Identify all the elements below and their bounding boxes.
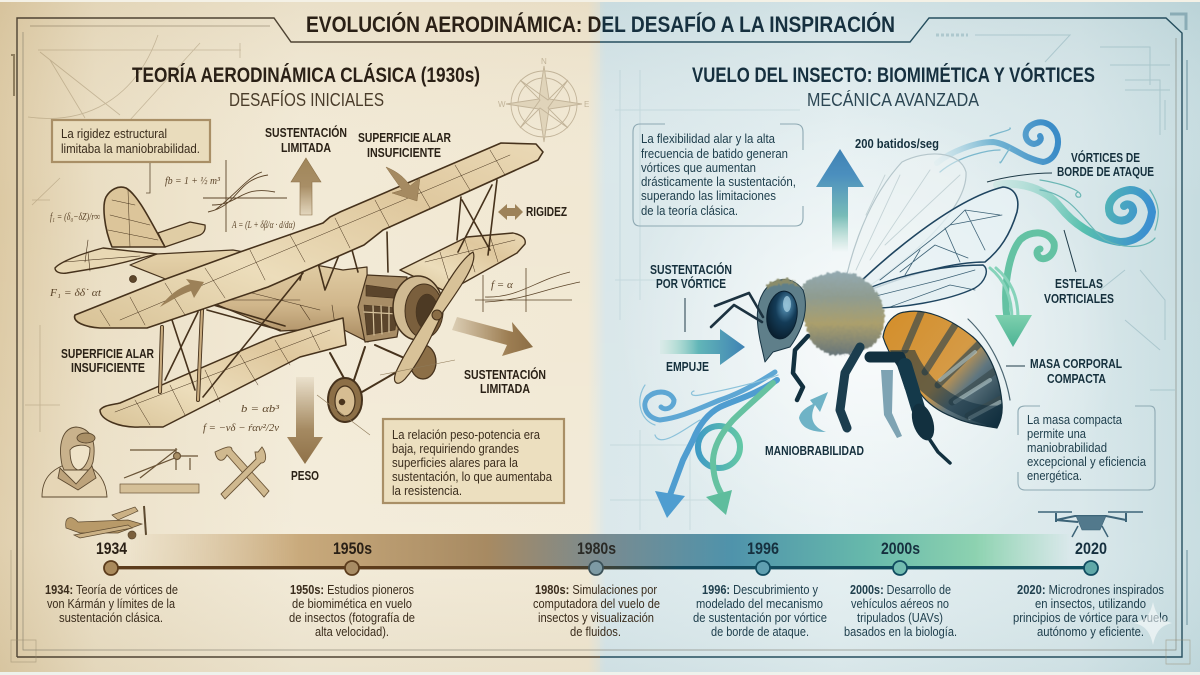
illustration: biplane [55,143,543,427]
arrow: blue down [655,491,685,518]
middle leg [840,347,860,428]
hind leg [870,357,910,387]
compound eye [764,289,800,341]
milestone: 2020 [1013,539,1168,639]
callout: wing flexibility: frecuencia de batido generan [641,146,788,161]
milestone: 2000s: 2000s [881,539,920,558]
back wing faint [842,154,966,302]
tail fin [104,187,165,247]
tail stabilizer [55,248,157,273]
callout: compact mass: energética. [1027,468,1082,483]
milestone: 2020: autónomo y eficiente. [1037,624,1144,639]
cockpit ring [268,256,290,276]
label: insufficient wing surface bottom: SUPERFICIE ALAR [61,346,154,361]
illustration: bee [711,154,1018,463]
milestone: 1996: modelado del mecanismo [696,596,823,611]
milestone: 1934: 1934: Teoría de vórtices de [45,582,178,597]
engine cowling [393,276,443,340]
label: limited lift top: SUSTENTACIÓN [265,125,347,140]
label: limited lift bottom [464,367,546,396]
arrow: thrust [660,329,745,365]
icon: crossed wrenches [215,447,269,499]
front leg [793,336,808,400]
label: limited lift top [265,125,347,155]
milestone: 1996 [693,539,827,639]
green stream [713,383,773,495]
wing struts [160,310,202,400]
milestone: 1950s: de biomimética en vuelo [292,596,412,611]
icon: compass rose: E [584,100,589,109]
rear stabilizer [158,222,205,247]
milestone: 2000s: vehículos aéreos no [851,596,949,611]
milestone: 1950s: de insectos (fotografía de [289,610,415,625]
label: vortex lift: POR VÓRTICE [656,276,726,291]
milestone: 1950s [289,539,415,639]
panel: insect flight [633,63,1158,537]
callout: structural rigidity [52,120,210,193]
upper wing [75,143,543,328]
callout: compact mass [1018,406,1155,490]
lower left wing [100,318,346,427]
label: compact body mass: COMPACTA [1047,371,1106,386]
abdomen [884,312,1002,428]
math sketch: lift formula and graph: A = (L + δβ/α · d/dα) [231,219,295,231]
arrow: beat frequency up [816,149,864,252]
math sketch: left formulas: F₁ = δδ˙ αt [49,287,102,299]
callout: weight to power ratio: La relación peso-potencia era [392,427,541,442]
callout: weight to power ratio: superficies alares para la [392,455,519,470]
math sketch: lower formula: b = αb³ [241,403,280,415]
label: insufficient wing surface bottom: INSUFICIENTE [71,360,145,375]
milestone: 2000s [844,539,957,639]
math sketch: lift formula and graph: fb = 1 + ½ m³ [165,175,221,187]
subheading: initial challenges: DESAFÍOS INICIALES [229,90,384,110]
label: rigidity with arrow: RIGIDEZ [526,204,567,219]
label: leading edge vortices: VÓRTICES DE [1071,150,1140,165]
label: insufficient wing surface bottom [61,346,154,375]
callout: wing flexibility: La flexibilidad alar y la alta [641,131,776,146]
label: vortex wakes: ESTELAS [1055,276,1103,291]
milestone: 2000s: basados en la biología. [844,624,957,639]
arrow: curved on wing [160,279,204,307]
milestone: 1980s: 1980s [577,539,616,558]
label: vortex wakes [1044,230,1114,306]
fore wing [840,187,1018,302]
milestone: 1934: von Kármán y límites de la [47,596,176,611]
abdomen outline [883,311,1002,428]
fuselage [130,250,368,342]
timeline colour band [130,534,1070,568]
background: circuit traces, right [610,35,1175,530]
milestone: 1980s [533,539,660,639]
math sketch: right graph [475,268,580,312]
arrow: green wake down [995,315,1032,347]
label: leading edge vortices [987,150,1154,182]
label: wing beats: 200 batidos/seg [855,136,939,151]
blue stream [670,380,777,495]
head [757,280,805,362]
math sketch: left formulas [49,211,102,299]
label: limited lift bottom: LIMITADA [480,381,530,396]
illustration: vortex swirls lower left [640,372,778,495]
callout: weight to power ratio: la resistencia. [392,483,462,498]
main wheel [328,378,362,422]
icon: compass rose: N [541,57,547,66]
label: limited lift top: LIMITADA [281,140,331,155]
callout: wing flexibility: superando las limitaciones [641,188,776,203]
milestone: 2020: en insectos, utilizando [1035,596,1146,611]
tail wheel [130,276,136,282]
antennae [711,293,763,327]
label: compact body mass: MASA CORPORAL [1030,356,1122,371]
callout: weight to power ratio: sustentación, lo que aumentaba [392,469,553,484]
label: insufficient wing surface top: INSUFICIENTE [367,145,441,160]
icon: compass rose: W [498,100,506,109]
callout: wing flexibility [633,124,803,226]
milestone: 1980s: 1980s: Simulaciones por [535,582,658,597]
icon: compass rose [498,57,589,142]
label: maneuverability: MANIOBRABILIDAD [765,443,864,458]
main title: EVOLUCIÓN AERODINÁMICA: DEL DESAFÍO A LA INSPIRACIÓN [306,12,895,37]
label: vortex lift [650,262,732,332]
callout: compact mass: permite una [1027,426,1087,441]
hind wing [840,265,986,308]
milestone: 1950s: 1950s: Estudios pioneros [290,582,414,597]
label: vortex wakes: VORTICIALES [1044,291,1114,306]
milestone: 1996: 1996: Descubrimiento y [702,582,818,597]
icon: drafting tool and ruler [120,448,199,493]
swirl: green ring [698,426,740,468]
milestone: 1980s: computadora del vuelo de [533,596,660,611]
milestone: 1980s: de fluidos. [570,624,621,639]
label: insufficient wing surface top: SUPERFICIE ALAR [358,130,451,145]
math sketch: left formulas: f₁ = (δ₀−δZ)/r∞ [50,211,100,223]
background: drafting sketch lines, left [25,35,241,432]
math sketch: lower formula [203,360,455,435]
callout: compact mass: maniobrabilidad [1027,440,1107,455]
icon: pilot portrait [42,427,107,497]
arrow: maneuverability [799,392,828,432]
milestone: 1996: de borde de ataque. [711,624,809,639]
callout: compact mass: excepcional y eficiencia [1027,454,1147,469]
math sketch: right graph: f = α [491,279,513,291]
callout: weight to power ratio: baja, requiriendo grandes [392,441,519,456]
label: limited lift bottom: SUSTENTACIÓN [464,367,546,382]
milestone: 2020: principios de vórtice para vuelo [1013,610,1168,625]
label: vortex lift: SUSTENTACIÓN [650,262,732,277]
callout: structural rigidity: limitaba la maniobrabilidad. [61,141,200,156]
abdomen arc [968,319,1010,400]
milestone: 2020: 2020: Microdrones inspirados [1017,582,1164,597]
propeller [395,252,474,383]
swirl: green down [1006,233,1054,318]
panel: classical aerodynamic theory [42,57,589,539]
milestone: 1934: 1934 [96,539,127,558]
faint rear leg [881,370,902,438]
heading: insect flight: VUELO DEL INSECTO: BIOMIMÉTICA Y VÓRTICES [692,63,1095,87]
milestone: 2000s: 2000s: Desarrollo de [850,582,951,597]
label: insufficient wing surface top [358,130,451,160]
timeline axis [111,566,1091,569]
icon: drone [1038,512,1143,537]
landing gear [330,345,420,392]
callout: wing flexibility: vórtices que aumentan [641,160,756,175]
thorax [802,272,884,355]
engine cylinders [358,275,407,342]
milestone: 1934: sustentación clásica. [59,610,163,625]
milestone: 1934 [45,539,178,625]
illustration: vortex swirls upper right [937,122,1158,320]
subheading: advanced mechanics: MECÁNICA AVANZADA [807,90,979,110]
milestone: 1980s: insectos y visualización [538,610,654,625]
icon: small biplane [66,506,146,539]
label: rigidity with arrow [498,204,567,220]
math sketch: lift formula and graph [165,160,295,232]
arrow: weight down [287,377,323,464]
arrow: lift up [291,158,321,215]
milestone: 1996: de sustentación por vórtice [693,610,827,625]
swirl: teal trailing [997,184,1152,242]
label: compact body mass [1006,356,1122,386]
callout: weight to power ratio [383,419,564,503]
callout: structural rigidity: La rigidez estructural [61,126,167,141]
milestone: 2000s: tripulados (UAVs) [857,610,943,625]
icon: sparkle watermark [1134,602,1172,645]
math sketch: lower formula: f = −νδ − ŕαν²/2ν [203,422,279,434]
callout: wing flexibility: drásticamente la sustentación, [641,174,796,189]
callout: compact mass: La masa compacta [1027,412,1123,427]
callout: wing flexibility: de la teoría clásica. [641,203,738,218]
rear wheel [410,345,436,379]
swirl: leading edge blue [937,122,1058,163]
arrow: green down [706,490,732,515]
milestone: 1950s: 1950s [333,539,372,558]
label: weight: PESO [291,468,319,483]
label: thrust: EMPUJE [666,359,709,374]
milestone: 2020: 2020 [1075,539,1107,558]
arrow: limited lift right [452,317,533,356]
milestone: 1950s: alta velocidad). [315,624,389,639]
label: leading edge vortices: BORDE DE ATAQUE [1057,164,1154,179]
lower right wing [400,233,525,292]
timeline [45,534,1168,639]
milestone: 1996: 1996 [747,539,779,558]
swirl: blue left [645,372,775,420]
heading: classical theory: TEORÍA AERODINÁMICA CLÁSICA (1930s) [132,64,480,87]
arrow: wing surface [386,167,420,201]
